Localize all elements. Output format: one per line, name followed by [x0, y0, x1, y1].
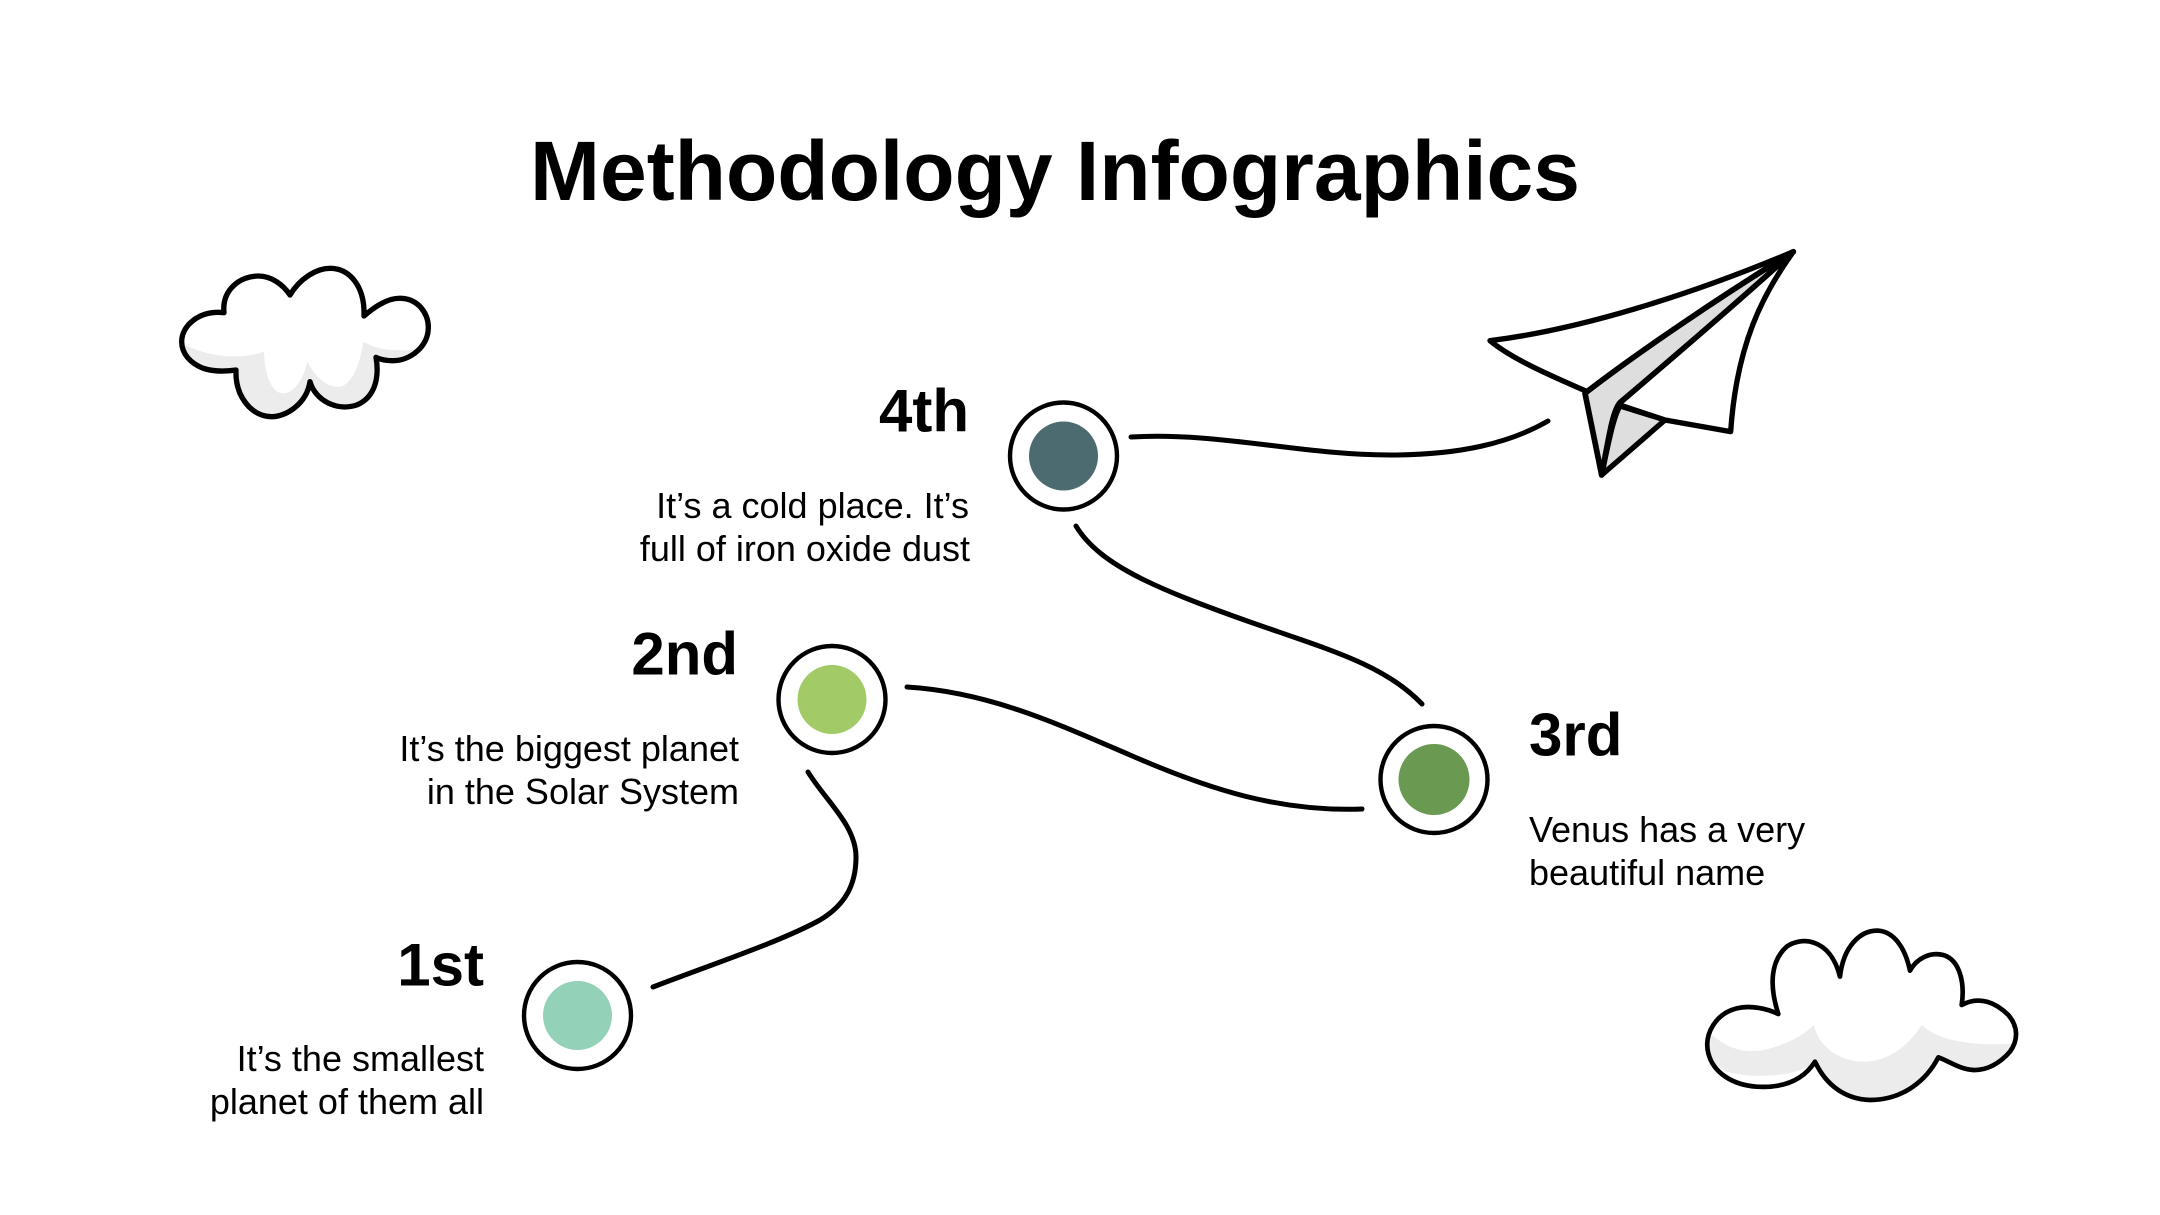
icon: paper airplane [1490, 252, 1793, 475]
title: Methodology Infographics [530, 124, 1580, 218]
node 1st [524, 962, 631, 1069]
text 2nd: in the Solar System [427, 771, 739, 812]
icon: cloud top left [180, 268, 430, 440]
step: 4th [640, 378, 1117, 569]
arrow: 1st to 2nd connector [653, 772, 856, 987]
heading 4th: 4th [879, 378, 969, 444]
node 4th [1010, 402, 1117, 510]
text 1st: It’s the smallest [237, 1038, 484, 1079]
text 3rd: Venus has a very [1529, 809, 1805, 850]
arrow: 3rd to 4th connector [1076, 526, 1422, 704]
text 2nd: It’s the biggest planet [399, 728, 739, 769]
text 4th: full of iron oxide dust [640, 528, 970, 569]
arrow: 2nd to 3rd connector [907, 687, 1362, 809]
icon: cloud bottom right [1707, 931, 2022, 1110]
step: 2nd [399, 620, 886, 812]
node 3rd [1380, 726, 1488, 833]
node 2nd [778, 646, 886, 753]
step: 1st [210, 932, 631, 1122]
text 1st: planet of them all [210, 1081, 484, 1122]
infographic canvas [179, 138, 2018, 1122]
heading 3rd: 3rd [1529, 702, 1622, 768]
arrow: 4th to airplane connector [1131, 421, 1548, 455]
step: 3rd [1380, 702, 1805, 893]
text 4th: It’s a cold place. It’s [656, 485, 969, 526]
text 3rd: beautiful name [1529, 852, 1765, 893]
heading 2nd: 2nd [631, 620, 738, 688]
heading 1st: 1st [397, 932, 484, 998]
